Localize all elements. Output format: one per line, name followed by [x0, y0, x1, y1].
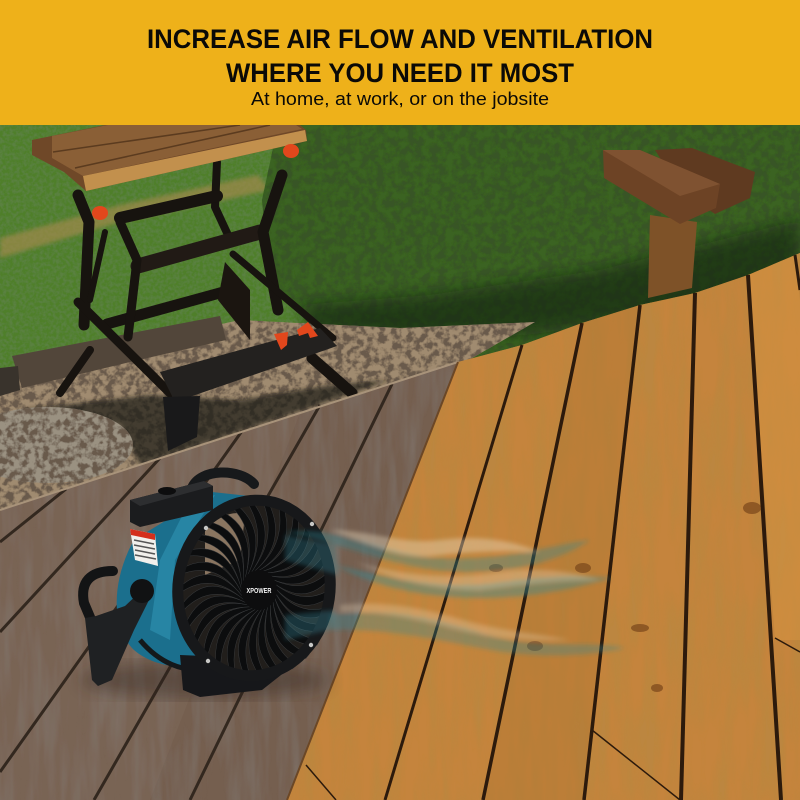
fan: blue housing — [117, 492, 268, 666]
scene: wooden post — [603, 148, 755, 298]
fan: hub with logo — [241, 570, 277, 610]
heading line 1: INCREASE AIR FLOW AND VENTILATION — [147, 24, 653, 54]
bench: orange knobs — [92, 144, 318, 350]
bench: brace plate — [218, 262, 250, 340]
deck: grey board gaps — [0, 384, 392, 800]
fan: warning label — [130, 529, 158, 566]
scene: timber edging — [0, 316, 226, 396]
deck: orange boards — [287, 253, 800, 800]
air stream: upper teal and peach waves — [285, 530, 612, 598]
subheading: At home, at work, or on the jobsite — [251, 89, 549, 109]
fan: side stand — [83, 571, 154, 686]
air stream: lower teal and peach waves — [330, 604, 625, 656]
banner: yellow header — [0, 0, 800, 125]
fan: control box — [130, 481, 213, 527]
scene: green bushes — [262, 125, 800, 370]
fan: foot base — [180, 655, 300, 697]
fan: outer ring — [166, 490, 342, 686]
heading line 2: WHERE YOU NEED IT MOST — [226, 58, 574, 88]
fan: carry handle — [192, 472, 254, 488]
bench: front leg — [163, 396, 200, 451]
fan: blades — [179, 499, 335, 681]
workbench — [32, 125, 352, 451]
fan: hub with logo: XPOWER — [246, 588, 272, 595]
scene: grass lawn — [0, 125, 330, 375]
bench: frame — [60, 162, 352, 393]
air stream: front of fan tint — [285, 535, 338, 640]
fan shadow — [80, 662, 330, 698]
fan — [83, 472, 342, 697]
deck: wood knots — [489, 502, 761, 692]
bench: wooden top — [32, 125, 307, 191]
bench: metal step — [160, 328, 337, 402]
fan: back grille interior — [170, 493, 340, 685]
air flow streams — [285, 530, 625, 656]
deck: grey boards — [0, 362, 458, 800]
scene: gravel bed — [0, 320, 535, 512]
fan: ring screws — [204, 522, 314, 663]
deck: orange board gaps — [287, 255, 800, 800]
